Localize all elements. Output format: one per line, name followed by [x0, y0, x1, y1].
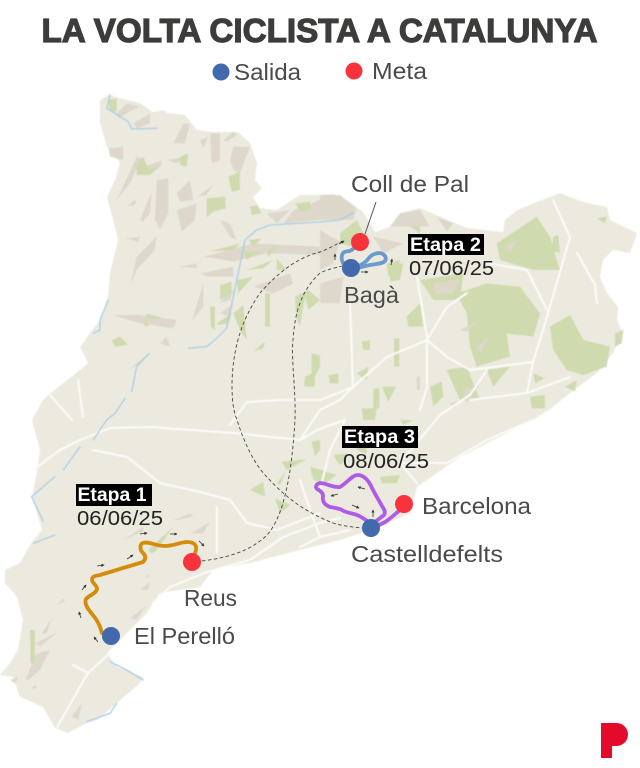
label: Coll de Pal: Coll de Pal: [351, 171, 469, 197]
mountain shading: [108, 103, 357, 370]
legend: Meta: [372, 58, 427, 84]
marker: Barcelona finish: [395, 495, 413, 513]
marker: Coll de Pal finish: [351, 233, 369, 251]
logo: [601, 723, 628, 758]
stage label: Etapa 1: 06/06/25: [77, 508, 163, 530]
stage label: Etapa 2: Etapa 2: [410, 235, 481, 256]
marker: Bagà start: [342, 259, 360, 277]
label: El Perelló: El Perelló: [134, 623, 235, 649]
marker: Reus finish: [183, 553, 201, 571]
forests north-west: [108, 98, 320, 387]
rivers: [32, 95, 353, 722]
stage label: Etapa 2: 07/06/25: [409, 258, 494, 280]
dashed connector: stage 1 to stage 2: [202, 266, 342, 561]
marker: El Perelló start: [102, 627, 120, 645]
stage label: Etapa 3: [342, 426, 429, 473]
stage label: Etapa 3: Etapa 3: [344, 427, 415, 448]
forests north-east: [328, 217, 623, 420]
label: Castelldefelts: Castelldefelts: [351, 541, 503, 567]
forests south: [30, 420, 413, 663]
stage label: Etapa 3: 08/06/25: [343, 451, 429, 473]
southern mountains: [10, 513, 210, 720]
marker: Castelldefelts start: [362, 519, 380, 537]
label: Reus: Reus: [184, 585, 237, 611]
direction arrows: [79, 241, 392, 642]
stage label: Etapa 2: [408, 234, 494, 280]
leader line: Coll de Pal: [365, 202, 376, 234]
stage label: Etapa 1: Etapa 1: [78, 485, 147, 506]
legend: Salida: [234, 59, 301, 85]
dashed connector: stage 2 to stage 3: [232, 241, 362, 528]
label: Bagà: Bagà: [344, 282, 399, 308]
label: Barcelona: Barcelona: [422, 493, 531, 519]
route: stage 2: [342, 249, 386, 268]
route: stage 1: [85, 542, 196, 633]
stage label: Etapa 1: [76, 484, 163, 530]
legend: [212, 58, 427, 85]
title: LA VOLTA CICLISTA A CATALUNYA: [42, 12, 598, 49]
north-eastern mountains: [320, 195, 517, 408]
roads: [33, 200, 597, 727]
route: stage 3: [316, 475, 400, 526]
